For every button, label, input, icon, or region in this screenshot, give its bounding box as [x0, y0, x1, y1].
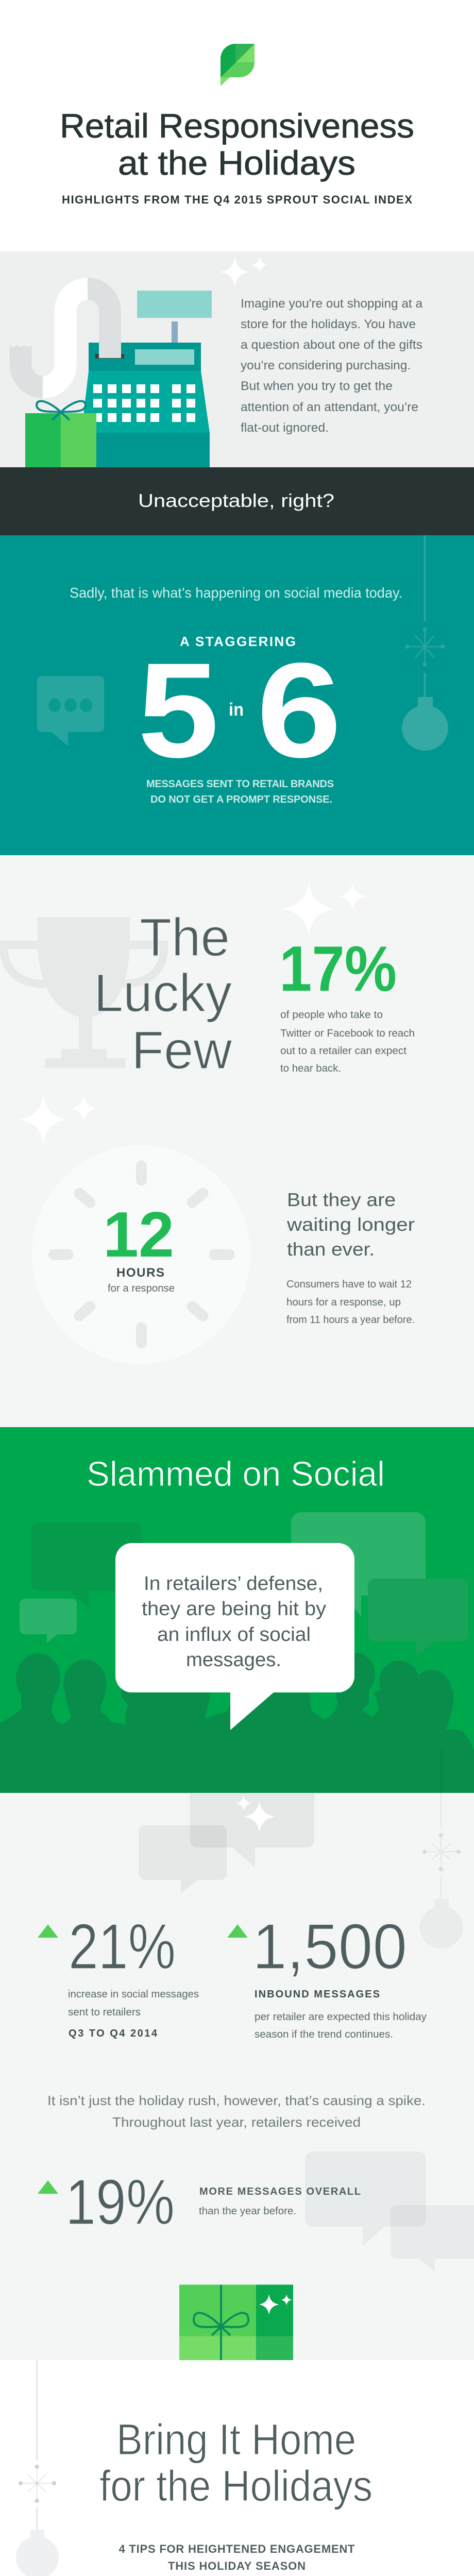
stat: 19 percent: MORE MESSAGES OVERALL — [199, 2186, 361, 2197]
stat: 21 percent: sent to retailers — [68, 2007, 141, 2018]
subheading: four tips — [118, 2543, 355, 2572]
text: consumers — [286, 1279, 415, 1326]
icon: lower chat bubbles — [305, 2151, 474, 2272]
text: consumers: from 11 hours a year before. — [286, 1314, 415, 1326]
panel: unacceptable bar — [0, 467, 474, 535]
icon: chat bubble — [37, 676, 104, 746]
panel: lucky few — [0, 855, 474, 1427]
title: Retail Responsiveness — [60, 107, 414, 145]
heading: bring it home: Bring It Home — [116, 2415, 356, 2464]
stat: 19 percent: 19% — [65, 2167, 175, 2238]
panel: message stats — [0, 1748, 474, 2360]
icon: top chat bubbles — [139, 1793, 314, 1893]
title: at the Holidays — [118, 144, 356, 182]
text: of people: of people who take to — [280, 1009, 383, 1021]
text: sadly: Sadly, that is what’s happening on social media today. — [70, 585, 402, 601]
stat: 5 in 6: 6 — [257, 635, 342, 786]
text: messages caption — [146, 778, 334, 805]
stat: 5 in 6 — [138, 635, 342, 786]
callout: retailers defense: an influx of social — [157, 1624, 311, 1646]
subheading: four tips: THIS HOLIDAY SEASON — [168, 2560, 306, 2572]
heading: bring it home: for the Holidays — [99, 2462, 373, 2510]
heading: waiting longer: than ever. — [287, 1239, 375, 1260]
callout: retailers defense: In retailers’ defense, — [144, 1573, 323, 1595]
stat: 19 percent — [38, 2167, 361, 2238]
title — [60, 107, 414, 182]
icon: sparkles — [235, 1795, 275, 1833]
heading: the lucky few: The — [140, 908, 230, 968]
illustration: crowd silhouettes — [0, 1649, 474, 1793]
stat: 5 in 6: in — [229, 700, 244, 720]
text block: imagine: a question about one of the gifts — [241, 338, 422, 352]
text: not just the holiday rush: Throughout last year, retailers received — [112, 2114, 361, 2130]
heading: the lucky few — [94, 908, 232, 1080]
stat: 5 in 6: 5 — [138, 635, 219, 786]
icon: green gift — [179, 2284, 293, 2360]
heading: waiting longer — [286, 1189, 415, 1260]
panel: slammed on social — [0, 1427, 474, 1793]
icon: sprout leaf logo — [221, 44, 255, 86]
text: of people — [280, 1009, 415, 1074]
icon: trophy — [4, 917, 164, 1068]
heading: unacceptable: Unacceptable, right? — [138, 490, 334, 511]
heading: waiting longer: But they are — [287, 1189, 396, 1210]
heading: waiting longer: waiting longer — [286, 1214, 415, 1235]
text block: imagine: But when you try to get the — [241, 379, 393, 393]
panel: five in six — [0, 535, 474, 855]
stat: 1,500 inbound: per retailer are expected this holiday — [255, 2011, 427, 2023]
text: of people: out to a retailer can expect — [280, 1045, 407, 1057]
heading: the lucky few: Lucky — [94, 963, 232, 1023]
heading: bring it home — [99, 2415, 373, 2510]
stat: 21 percent: 21% — [69, 1911, 176, 1982]
stat: 12 hours: HOURS — [116, 1266, 164, 1280]
text: a staggering: A STAGGERING — [180, 634, 296, 649]
text block: imagine: attention of an attendant, you’re — [241, 400, 418, 414]
icon: clock — [32, 1145, 250, 1364]
panel: intro — [0, 251, 474, 467]
subheading: four tips: 4 TIPS FOR HEIGHTENED ENGAGEMENT — [118, 2543, 355, 2555]
subtitle: HIGHLIGHTS FROM THE Q4 2015 SPROUT SOCIAL INDEX — [62, 193, 412, 206]
callout: retailers defense: they are being hit by — [142, 1598, 326, 1620]
text block: imagine: flat-out ignored. — [241, 421, 329, 435]
icon: sparkles — [282, 882, 366, 936]
icon: ornament — [419, 1748, 463, 1948]
callout: retailers defense: messages. — [186, 1649, 281, 1671]
icon: ornament — [402, 535, 448, 751]
stat: 21 percent — [38, 1911, 199, 2039]
icon: background chat bubbles — [20, 1512, 468, 1656]
text: messages caption: MESSAGES SENT TO RETAIL BRANDS — [146, 778, 334, 790]
header — [60, 44, 414, 206]
callout: retailers defense — [115, 1543, 354, 1730]
text block: imagine: store for the holidays. You have — [241, 317, 416, 331]
stat: 1,500 inbound: 1,500 — [252, 1911, 407, 1982]
text block: imagine: you’re considering purchasing. — [241, 359, 411, 372]
stat: 17 percent: 17% — [279, 934, 397, 1005]
heading: slammed on social: Slammed on Social — [87, 1454, 385, 1494]
icon: cash register with gift — [9, 289, 212, 467]
text block: imagine: Imagine you're out shopping at a — [241, 297, 423, 311]
text: not just the holiday rush — [47, 2093, 426, 2130]
heading: the lucky few: Few — [131, 1021, 232, 1080]
stat: 1,500 inbound: season if the trend continues. — [255, 2029, 393, 2040]
text: of people: Twitter or Facebook to reach — [280, 1028, 415, 1039]
stat: 1,500 inbound — [227, 1911, 427, 2040]
text: consumers: Consumers have to wait 12 — [286, 1279, 412, 1290]
stat: 21 percent: increase in social messages — [68, 1989, 199, 2000]
text: consumers: hours for a response, up — [286, 1297, 401, 1308]
icon: ornament — [16, 2360, 59, 2576]
text block: imagine — [241, 297, 423, 435]
text: not just the holiday rush: It isn’t just the holiday rush, however, that’s causing a spike. — [47, 2093, 426, 2108]
stat: 19 percent: than the year before. — [199, 2206, 296, 2217]
icon: sparkles — [19, 1095, 97, 1144]
text: of people: to hear back. — [280, 1063, 341, 1074]
stat: 12 hours: 12 — [103, 1199, 174, 1270]
stat: 21 percent: Q3 TO Q4 2014 — [69, 2028, 158, 2039]
text: messages caption: DO NOT GET A PROMPT RESPONSE. — [150, 794, 332, 805]
panel: recommendations — [16, 2360, 371, 2576]
icon: sparkles — [220, 257, 268, 287]
stat: 12 hours: for a response — [108, 1283, 175, 1294]
stat: 1,500 inbound: INBOUND MESSAGES — [255, 1989, 380, 2000]
